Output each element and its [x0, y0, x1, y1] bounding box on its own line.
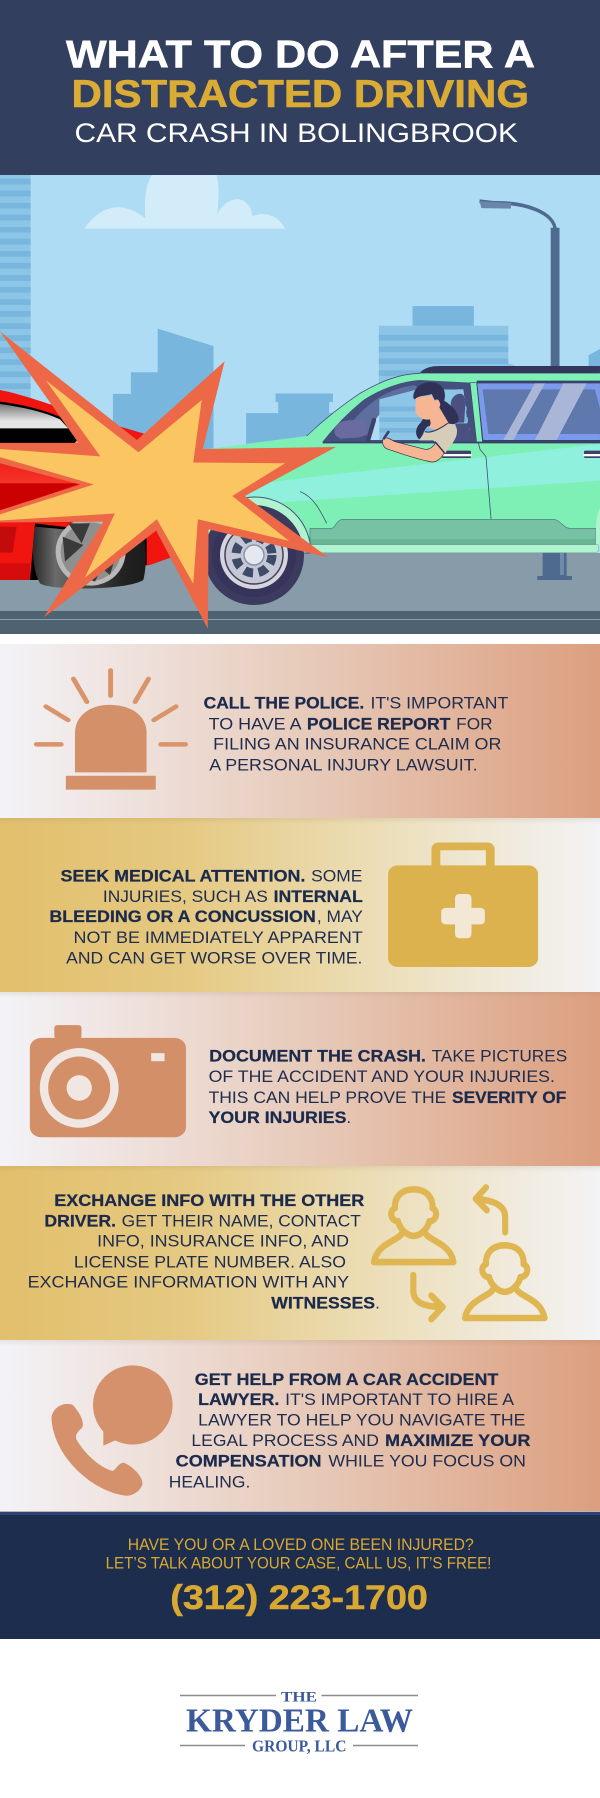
green car	[200, 366, 600, 553]
text: call the police: A PERSONAL INJURY LAWSUIT.	[209, 755, 478, 774]
text: seek medical attention: INJURIES, SUCH AS	[103, 887, 268, 906]
text: exchange info: EXCHANGE INFO WITH THE OTHER	[54, 1191, 364, 1210]
text: exchange info: .	[375, 1294, 380, 1313]
side windows	[323, 380, 600, 443]
text: seek medical attention: SEEK MEDICAL ATTENTION.	[60, 867, 305, 886]
title line 2: DISTRACTED DRIVING	[72, 73, 529, 116]
text: call the police: FILING AN INSURANCE CLAIM OR	[213, 734, 501, 754]
red car wheel	[33, 518, 146, 588]
street lamp base	[537, 552, 572, 580]
call to action text: HAVE YOU OR A LOVED ONE BEEN INJURED?	[128, 1536, 474, 1554]
text: get help from a lawyer: LAWYER TO HELP YOU NAVIGATE THE	[198, 1410, 525, 1429]
panel: get help from a lawyer	[0, 1340, 600, 1512]
icon: camera	[30, 1025, 186, 1137]
text: get help from a lawyer: WHILE YOU FOCUS ON	[328, 1452, 526, 1470]
text: document the crash: DOCUMENT THE CRASH.	[209, 1047, 426, 1066]
text: get help from a lawyer: COMPENSATION	[176, 1452, 322, 1470]
icon: two people exchanging info	[374, 1187, 545, 1319]
text: document the crash	[209, 1047, 567, 1127]
road	[0, 553, 600, 634]
header banner	[0, 0, 600, 175]
text: call the police: TO HAVE A	[209, 714, 302, 734]
text: get help from a lawyer	[169, 1370, 530, 1491]
text: call the police: POLICE REPORT	[307, 714, 451, 734]
text: document the crash: TAKE PICTURES	[432, 1047, 567, 1066]
icon: first aid kit	[388, 846, 538, 967]
text: call the police	[204, 694, 508, 774]
text: get help from a lawyer: LEGAL PROCESS AND	[191, 1431, 379, 1450]
icon: phone and speech bubble	[51, 1365, 173, 1496]
text: exchange info: EXCHANGE INFORMATION WITH ANY	[28, 1272, 349, 1291]
text: call the police: IT'S IMPORTANT	[370, 694, 508, 713]
panel: document the crash	[0, 992, 600, 1166]
city skyline and cloud	[0, 174, 600, 453]
text: exchange info	[28, 1191, 380, 1313]
logo: the kryder law group	[180, 1690, 418, 1756]
panel: seek medical attention	[0, 818, 600, 992]
text: call the police: FOR	[456, 714, 493, 734]
text: seek medical attention: BLEEDING OR A CONCUSSION	[49, 907, 316, 926]
steering mirror and stalk	[334, 420, 374, 439]
text: exchange info: WITNESSES	[271, 1294, 375, 1313]
text: get help from a lawyer: IT'S IMPORTANT TO HIRE A	[285, 1390, 515, 1409]
text: get help from a lawyer: MAXIMIZE YOUR	[385, 1431, 530, 1450]
text: seek medical attention: , MAY	[317, 907, 363, 926]
text: exchange info: LICENSE PLATE NUMBER. ALSO	[74, 1252, 346, 1271]
text: exchange info: GET THEIR NAME, CONTACT	[122, 1212, 361, 1230]
red car	[0, 390, 177, 588]
icon: police siren	[36, 670, 186, 790]
text: seek medical attention: NOT BE IMMEDIATELY APPARENT	[74, 928, 363, 947]
phone number: (312) 223-1700	[170, 1579, 428, 1617]
text: document the crash: THIS CAN HELP PROVE THE	[209, 1088, 446, 1107]
driver figure	[383, 382, 471, 462]
panel: call the police	[0, 644, 600, 818]
text: seek medical attention: AND CAN GET WORSE OVER TIME.	[66, 948, 362, 967]
text: seek medical attention: INTERNAL	[274, 887, 363, 906]
text: document the crash: SEVERITY OF	[452, 1088, 566, 1107]
crash scene illustration	[0, 174, 600, 634]
text: document the crash: OF THE ACCIDENT AND YOUR INJURIES.	[209, 1067, 555, 1086]
logo: the kryder law group: THE	[281, 1690, 317, 1706]
text: document the crash: YOUR INJURIES	[209, 1108, 346, 1127]
explosion starburst	[0, 331, 336, 629]
text: exchange info: INFO, INSURANCE INFO, AND	[97, 1232, 349, 1250]
call to action banner	[0, 1511, 600, 1639]
title line 1: WHAT TO DO AFTER A	[66, 34, 535, 76]
text: call the police: CALL THE POLICE.	[204, 694, 364, 713]
call to action text line 2: LET’S TALK ABOUT YOUR CASE, CALL US, IT’S FREE!	[106, 1555, 491, 1573]
title line 3: CAR CRASH IN BOLINGBROOK	[74, 118, 518, 148]
text: exchange info: DRIVER.	[44, 1212, 116, 1230]
text: document the crash: .	[346, 1108, 351, 1127]
text: seek medical attention	[49, 867, 363, 967]
logo: the kryder law group: GROUP, LLC	[252, 1736, 346, 1756]
text: get help from a lawyer: LAWYER.	[198, 1390, 279, 1409]
panel: exchange info	[0, 1166, 600, 1340]
text: get help from a lawyer: GET HELP FROM A CAR ACCIDENT	[195, 1370, 499, 1389]
text: seek medical attention: SOME	[311, 867, 362, 886]
door handles	[442, 451, 600, 458]
text: get help from a lawyer: HEALING.	[169, 1472, 250, 1491]
logo: the kryder law group: KRYDER LAW	[186, 1702, 413, 1740]
green car front wheel	[199, 497, 311, 605]
